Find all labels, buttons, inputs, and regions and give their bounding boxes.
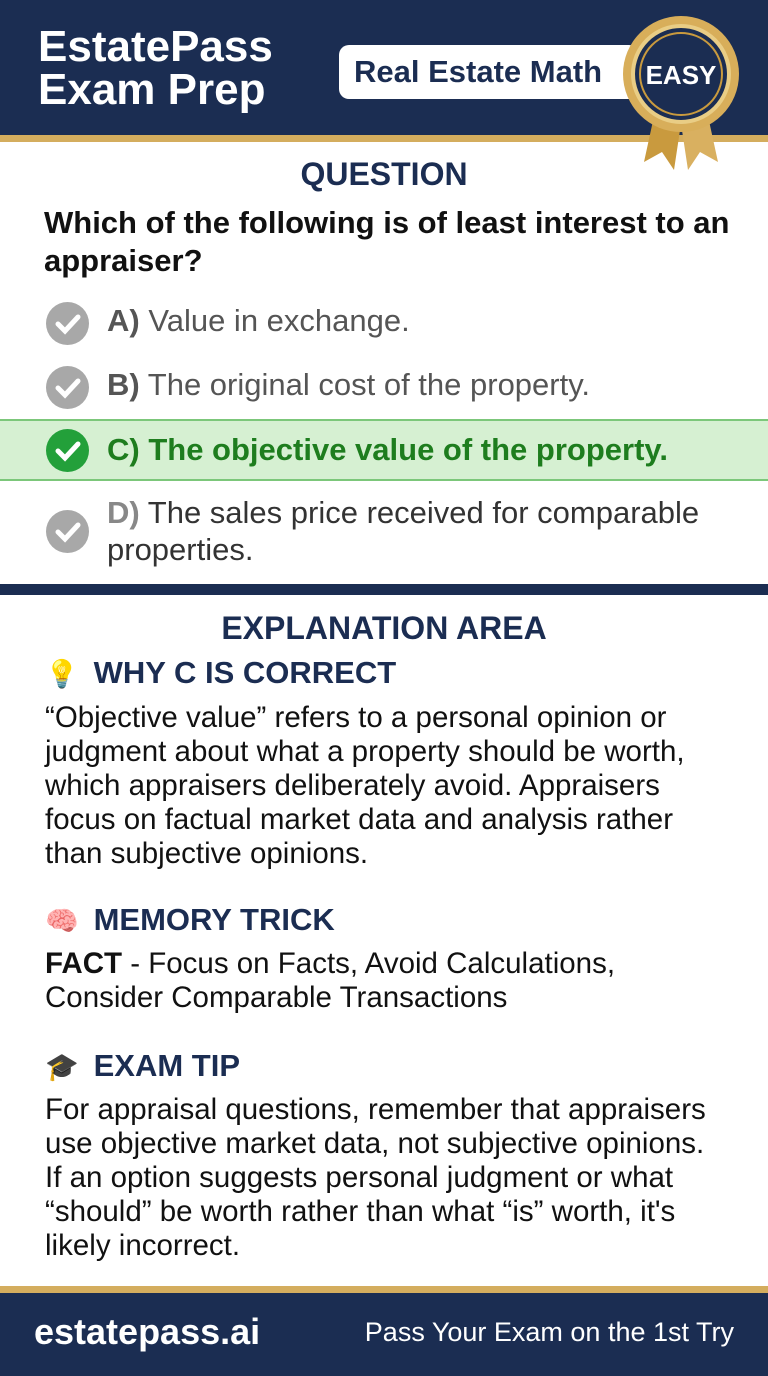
text: B) The original cost of the property. [107, 367, 590, 402]
option B [46, 366, 590, 409]
why text: “Objective value” refers to a personal opinion or judgment about what a property should be worth, which appraisers deliberately avoid. Appraisers focus on factual market data and analysis rather than subjective opinions. [45, 701, 685, 870]
header [0, 0, 768, 142]
exam tip heading: EXAM TIP [94, 1048, 240, 1083]
category pill [339, 45, 639, 99]
footer tagline: Pass Your Exam on the 1st Try [365, 1317, 734, 1347]
option A [46, 302, 410, 345]
footer [0, 1286, 768, 1376]
question heading: QUESTION [300, 156, 468, 192]
tip text: For appraisal questions, remember that appraisers use objective market data, not subjective opinions. If an option suggests personal judgment or what “should” be worth rather than what “is” worth, it's likely incorrect. [45, 1093, 706, 1262]
option D [46, 495, 699, 567]
brand title [38, 22, 273, 114]
option C correct [0, 419, 768, 481]
option C correct: C) The objective value of the property. [107, 432, 668, 467]
text: D) The sales price received for comparable properties. [107, 495, 699, 567]
footer url: estatepass.ai [34, 1311, 260, 1352]
question text: Which of the following is of least interest to an appraiser? [44, 205, 729, 278]
memory heading: MEMORY TRICK [94, 902, 335, 937]
badge: EASY: EASY [646, 60, 716, 90]
memory text: FACT - Focus on Facts, Avoid Calculations, Consider Comparable Transactions [45, 947, 615, 1014]
why C heading: 💡 [45, 659, 79, 689]
explanation heading: EXPLANATION AREA [221, 610, 547, 646]
why C heading: WHY C IS CORRECT [94, 655, 396, 690]
text: A) Value in exchange. [107, 303, 410, 338]
brand title: Exam Prep [38, 65, 265, 114]
divider [0, 584, 768, 595]
memory heading: 🧠 [45, 906, 79, 936]
exam tip heading: 🎓 [45, 1052, 79, 1082]
brand title: EstatePass [38, 22, 273, 71]
category pill: Real Estate Math [354, 54, 602, 89]
badge: EASY [623, 16, 739, 170]
